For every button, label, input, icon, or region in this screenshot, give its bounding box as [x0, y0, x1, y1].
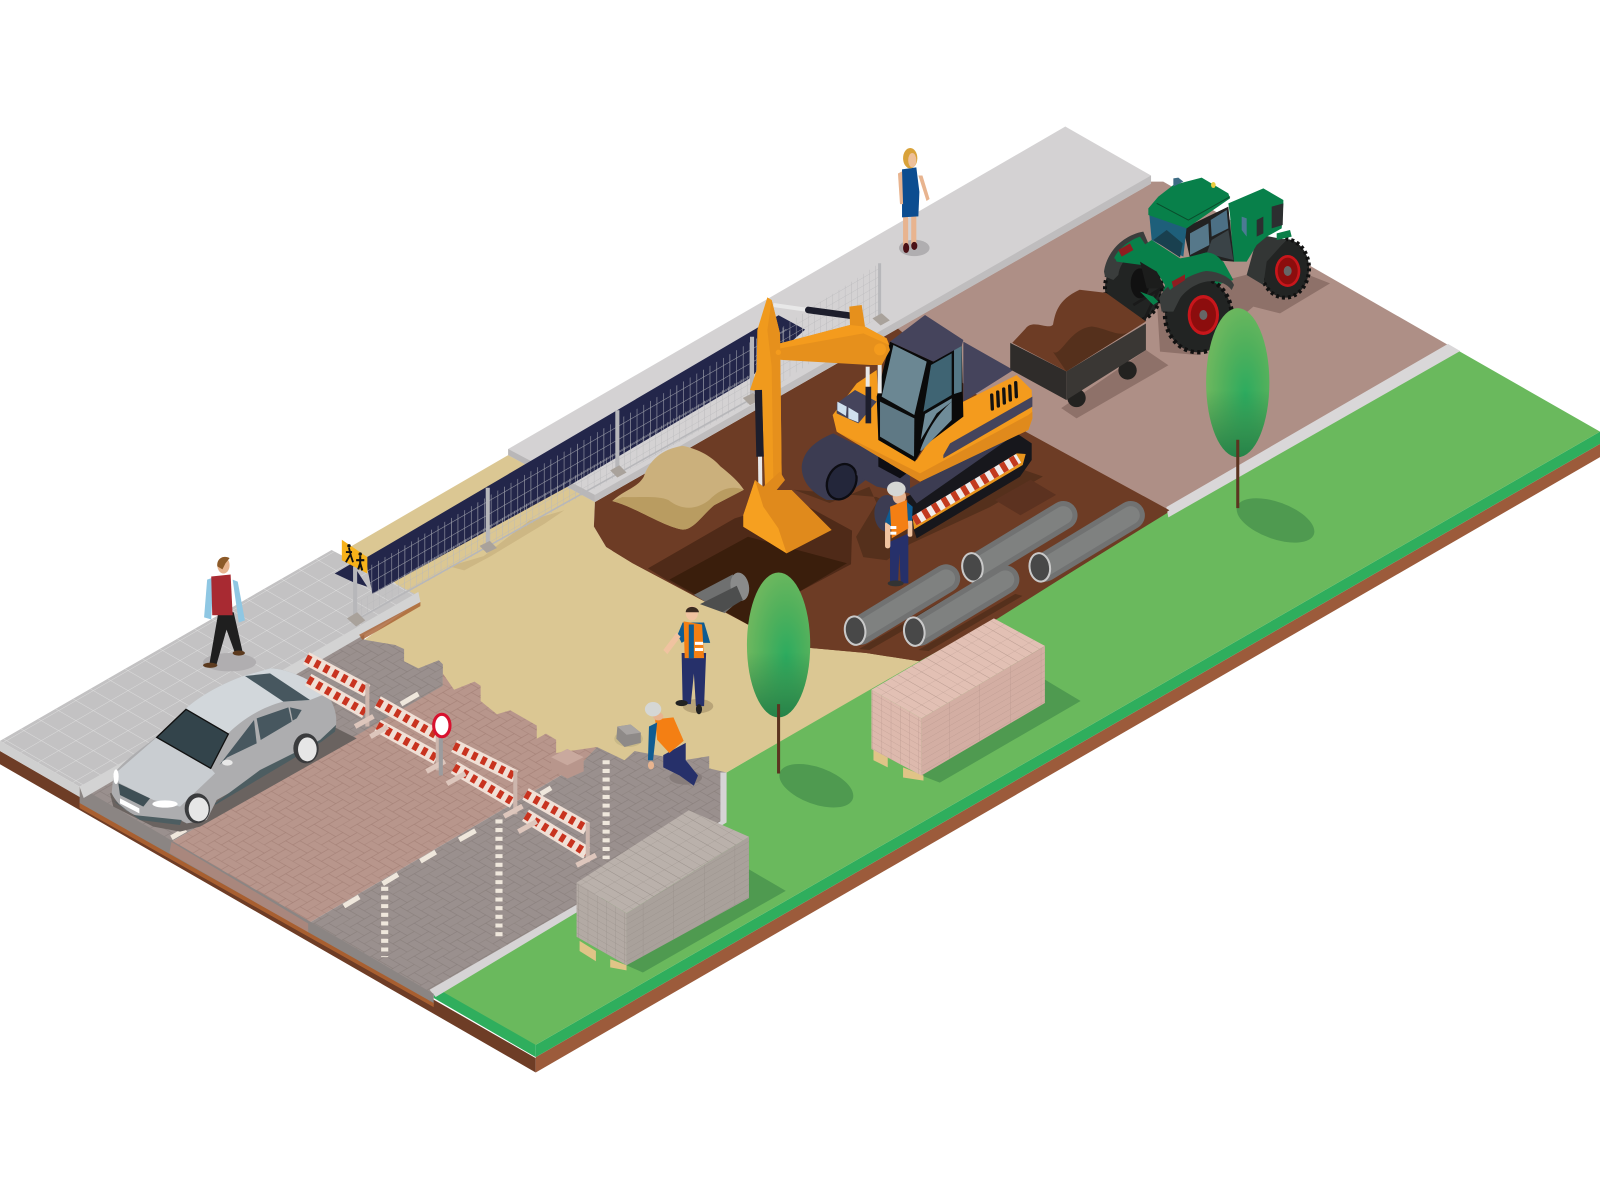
upper sidewalk	[508, 127, 1151, 502]
pit floor	[669, 537, 847, 624]
shadows of pipes	[859, 526, 1138, 651]
far rear wheel	[1261, 239, 1309, 298]
bucket	[743, 472, 832, 553]
barrier 3	[447, 746, 522, 816]
road markings	[171, 694, 606, 957]
pipe near right	[902, 580, 1005, 647]
excavation underlay	[602, 329, 1173, 663]
worker beside the track	[885, 482, 913, 586]
engine cover	[963, 342, 1013, 402]
tractor	[1104, 178, 1309, 352]
body green	[1115, 240, 1233, 302]
sand mound	[612, 446, 744, 530]
left front wheel	[1105, 255, 1162, 322]
dirt shadow layer	[648, 500, 852, 624]
boom	[770, 305, 890, 365]
arm	[750, 297, 782, 487]
front box	[837, 390, 877, 423]
grass	[436, 350, 1600, 1045]
cabin	[877, 315, 963, 462]
tiled left sidewalk	[0, 550, 420, 798]
front wheel	[185, 793, 210, 823]
pipes	[843, 515, 1131, 647]
barrier 4	[518, 794, 596, 865]
engine vents	[992, 383, 1016, 409]
fence with dark screening	[335, 263, 890, 627]
roof	[1148, 178, 1230, 228]
pedestrian detour sign	[342, 540, 367, 573]
trailer shadow	[1061, 350, 1168, 418]
big rear wheel	[1165, 278, 1232, 352]
left windows	[1149, 215, 1187, 257]
tree right with shadow	[1206, 308, 1320, 552]
orange upper body	[833, 370, 1032, 482]
no entry sign	[434, 714, 450, 776]
tractor shadow	[1157, 265, 1330, 355]
pipe far left	[960, 515, 1063, 583]
near fender	[1159, 271, 1234, 312]
kneeling worker laying bricks	[645, 702, 702, 786]
drawbar	[1133, 290, 1158, 322]
sand area	[350, 455, 919, 791]
barrier 1	[306, 658, 373, 727]
right windows	[1183, 207, 1234, 262]
concrete surface	[878, 182, 1460, 517]
top cylinder	[773, 305, 808, 310]
dirt shadow under the excavator	[794, 466, 1043, 560]
grey brick pallet	[577, 810, 786, 972]
arm cylinder	[758, 390, 760, 457]
undercarriage	[857, 450, 910, 493]
barrier 2	[370, 702, 445, 771]
road front edge	[80, 787, 434, 1007]
tree left with shadow	[747, 572, 859, 816]
ground slab side faces	[0, 432, 1600, 1072]
standing worker on the sand	[663, 606, 713, 714]
excavator	[743, 297, 1032, 586]
striped track guard	[913, 453, 1026, 529]
man walking on the sidewalk	[203, 557, 256, 671]
rear wheel	[293, 733, 319, 763]
car	[110, 668, 357, 832]
left track	[802, 433, 873, 500]
pink brick pallet	[871, 618, 1081, 783]
stack of loose grey bricks	[614, 724, 643, 747]
stack of loose pink bricks	[551, 749, 584, 779]
left fender	[1104, 232, 1148, 280]
pipe in the trench	[694, 571, 751, 613]
far track idler	[874, 495, 899, 532]
excavation dirt	[594, 329, 1169, 661]
brick road band: grey	[308, 747, 727, 997]
sand shadow beside the fence	[449, 510, 564, 570]
pipe far right	[1028, 515, 1131, 583]
trailer with soil	[1010, 290, 1146, 407]
brick road band: parking grey	[80, 624, 443, 842]
pipe near left	[843, 579, 946, 646]
right track	[907, 433, 1032, 538]
boom cylinders	[860, 387, 877, 423]
rear block	[1228, 188, 1283, 262]
brick road band: pink	[171, 673, 597, 923]
woman on the upper sidewalk	[898, 148, 930, 256]
